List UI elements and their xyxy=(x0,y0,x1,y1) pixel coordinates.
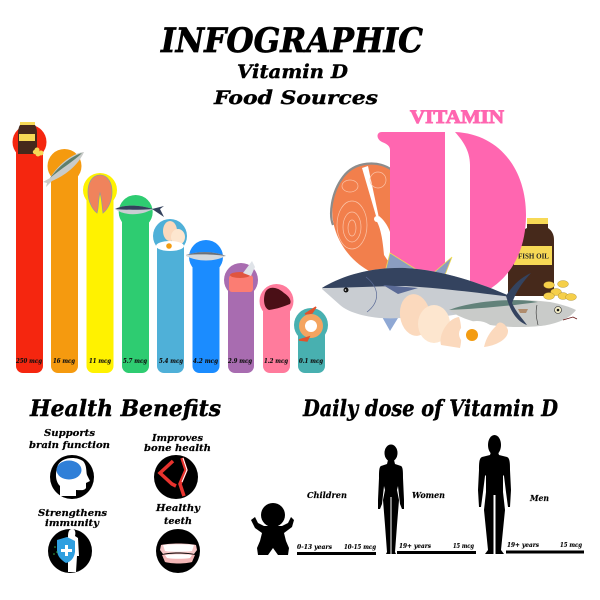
bar: tuna xyxy=(115,195,164,373)
icon: woman silhouette xyxy=(378,444,404,554)
benefit: immunity xyxy=(38,508,108,573)
title: Food Sources xyxy=(213,87,378,109)
bar: shrimp: 0.1 mcg xyxy=(299,358,323,365)
bar: canned food: 2.9 mcg xyxy=(227,358,252,365)
bar: eggs: 5.4 mcg xyxy=(159,358,183,365)
daily dose: women: Women xyxy=(412,490,445,500)
bar chart: food sources xyxy=(12,122,328,373)
daily dose: children xyxy=(251,490,376,555)
daily dose: children: Children xyxy=(307,490,347,500)
benefit: bone health xyxy=(144,433,211,499)
fish oil bottle xyxy=(508,218,554,296)
bar: shrimp xyxy=(294,307,328,373)
title: INFOGRAPHIC xyxy=(160,21,423,61)
bar: salmon xyxy=(83,173,117,373)
daily dose: children: 0-13 years xyxy=(297,544,333,551)
icon: man silhouette xyxy=(478,435,511,554)
daily dose: women xyxy=(378,444,476,554)
daily dose: women: 15 mcg xyxy=(453,543,474,550)
bar: tuna: 5.7 mcg xyxy=(123,358,147,365)
bar: sardine: 4.2 mcg xyxy=(193,358,218,365)
bar: canned food xyxy=(224,261,258,373)
daily dose: men: 15 mcg xyxy=(560,542,582,549)
benefit: immunity: immunity xyxy=(45,518,101,529)
bar: mackerel: 16 mcg xyxy=(53,358,75,365)
daily dose: women: 19+ years xyxy=(399,543,432,550)
benefit: teeth xyxy=(155,503,202,573)
fish oil bottle: FISH OIL xyxy=(518,252,549,260)
benefit: immunity: Strengthens xyxy=(38,508,108,519)
benefit: bone health: bone health xyxy=(144,443,211,454)
daily dose: men: Men xyxy=(529,493,549,503)
tuna tail xyxy=(506,273,531,325)
letter D xyxy=(378,132,526,298)
benefit: brain function xyxy=(29,428,110,499)
bar: fish oil: 250 mcg xyxy=(15,358,42,365)
daily dose: men xyxy=(478,435,584,554)
bar: fish oil xyxy=(12,122,46,373)
benefit: teeth: Healthy xyxy=(155,503,202,514)
heading: health benefits: Health Benefits xyxy=(29,396,221,422)
eggs xyxy=(397,292,508,348)
mackerel xyxy=(449,300,577,327)
tuna xyxy=(322,253,512,331)
bar: beef liver: 1.2 mcg xyxy=(264,358,288,365)
benefit: brain function: Supports xyxy=(44,428,96,439)
bar: beef liver xyxy=(260,284,294,373)
bar: sardine xyxy=(186,240,226,373)
benefit: bone health: Improves xyxy=(151,433,204,444)
daily dose: children: 10-15 mcg xyxy=(344,544,376,551)
bar: mackerel xyxy=(43,149,84,373)
fish oil capsules xyxy=(544,280,576,300)
salmon steak xyxy=(331,164,392,272)
daily dose: men: 19+ years xyxy=(507,542,540,549)
icon: baby silhouette xyxy=(251,503,294,555)
label: VITAMIN: VITAMIN xyxy=(410,107,504,128)
title: Vitamin D xyxy=(237,61,349,83)
benefit: brain function: brain function xyxy=(29,440,110,451)
bar: salmon: 11 mcg xyxy=(89,358,111,365)
benefit: teeth: teeth xyxy=(164,516,192,527)
title xyxy=(160,21,423,109)
illustration: vitamin D with foods xyxy=(322,107,577,348)
heading: daily dose: Daily dose of Vitamin D xyxy=(302,396,558,422)
bar: eggs xyxy=(153,219,187,373)
